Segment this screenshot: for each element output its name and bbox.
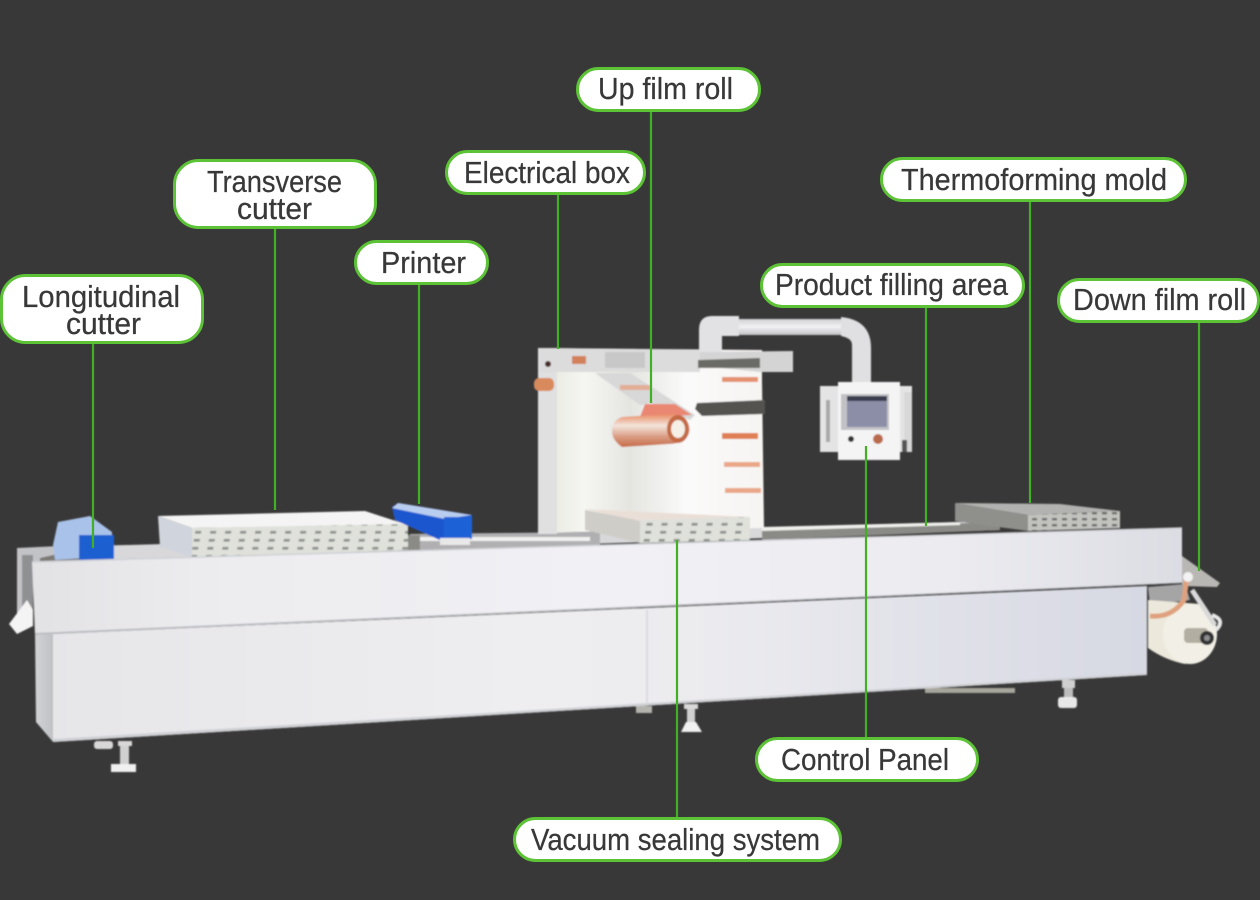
label: Longitudinal cutter [2, 276, 202, 342]
transverse cutter [158, 511, 420, 557]
machine lower body [35, 586, 1147, 742]
label: Longitudinal cutter: Longitudinal [22, 279, 180, 314]
printer [392, 503, 472, 545]
leader line: longitudinal cutter [92, 343, 94, 548]
adjustable feet [94, 680, 1077, 772]
label: Transverse cutter [174, 160, 376, 228]
label: Transverse cutter: Transverse [207, 164, 342, 199]
label: Printer: Printer [381, 245, 466, 280]
up film roll frame [534, 348, 793, 534]
longitudinal cutter [53, 516, 114, 561]
label: Vacuum sealing system: Vacuum sealing system [531, 822, 820, 857]
leader line: transverse cutter [274, 228, 276, 510]
machine [9, 316, 1220, 772]
left end frame [9, 546, 60, 634]
leader line: up film roll [650, 111, 652, 403]
control panel [820, 382, 912, 460]
leader line: vacuum sealing system [676, 540, 678, 818]
label: Up film roll [578, 68, 760, 110]
overhead conduit [699, 316, 871, 382]
label: Printer [356, 242, 488, 284]
leader line: down film roll [1198, 322, 1200, 571]
label: Longitudinal cutter: cutter [66, 306, 141, 341]
down film roll assembly [1148, 556, 1220, 664]
thermoforming mold [955, 503, 1120, 531]
leader line: thermoforming mold [1029, 201, 1031, 503]
label: Electrical box: Electrical box [464, 155, 630, 190]
label: Product filling area: Product filling area [775, 267, 1009, 302]
label: Control Panel: Control Panel [781, 742, 949, 777]
vacuum sealing chamber [585, 509, 750, 543]
rails on top of body [40, 521, 1000, 564]
label: Up film roll: Up film roll [598, 71, 733, 106]
leader line: printer [418, 284, 420, 504]
leader line: product filling area [925, 307, 927, 526]
machine upper band [32, 528, 1182, 635]
leader line: control panel [865, 446, 867, 738]
label: Transverse cutter: cutter [237, 191, 312, 226]
label: Thermoforming mold: Thermoforming mold [901, 162, 1167, 197]
label: Down film roll: Down film roll [1073, 282, 1246, 317]
leader line: electrical box [557, 194, 559, 349]
